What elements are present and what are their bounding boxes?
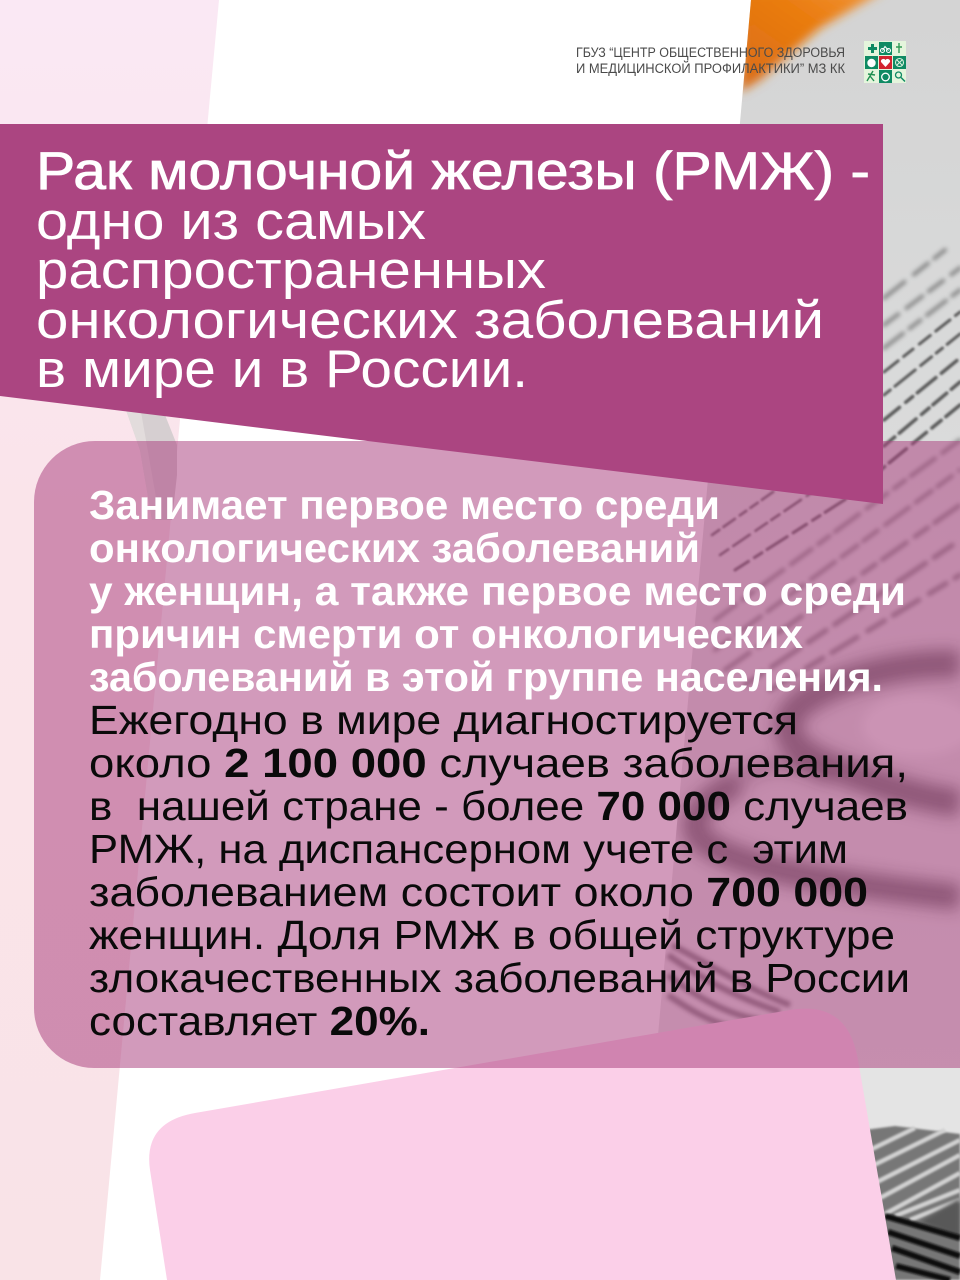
- body text: white bold statement: заболеваний в этой группе населения.: [89, 654, 883, 700]
- body text: white bold statement: [89, 482, 906, 700]
- title text: Рак молочной железы (РМЖ) -: [36, 142, 870, 201]
- organisation name header: ГБУЗ “ЦЕНТР ОБЩЕСТВЕННОГО ЗДОРОВЬЯ: [576, 45, 845, 60]
- title text: онкологических заболеваний: [36, 291, 824, 350]
- title text: распространенных: [36, 241, 546, 300]
- title text: [36, 142, 870, 399]
- body text: black statistics paragraph: составляет 20%.: [89, 998, 430, 1044]
- body text: white bold statement: Занимает первое место среди: [89, 482, 720, 528]
- body text: black statistics paragraph: женщин. Доля РМЖ в общей структуре: [89, 912, 895, 958]
- book page stripes bottom right: [865, 1126, 960, 1280]
- body text: black statistics paragraph: [89, 697, 910, 1044]
- body text: black statistics paragraph: около 2 100 000 случаев заболевания,: [89, 740, 908, 786]
- body text: white bold statement: у женщин, а также первое место среди: [89, 568, 906, 614]
- pink rounded shape at bottom: [149, 1009, 896, 1280]
- organisation name header: И МЕДИЦИНСКОЙ ПРОФИЛАКТИКИ” МЗ КК: [576, 61, 845, 76]
- body text: black statistics paragraph: заболеванием состоит около 700 000: [89, 869, 868, 915]
- body text: white bold statement: онкологических заболеваний: [89, 525, 700, 571]
- translucent text panel: [34, 441, 960, 1068]
- body text: black statistics paragraph: Ежегодно в мире диагностируется: [89, 697, 798, 743]
- body text: black statistics paragraph: РМЖ, на диспансерном учете с этим: [89, 826, 848, 872]
- body text: white bold statement: причин смерти от онкологических: [89, 611, 803, 657]
- pen in the left paper area: [126, 410, 177, 520]
- background: grey book photo on the right: [630, 0, 960, 1280]
- title text: одно из самых: [36, 192, 426, 251]
- title text: в мире и в России.: [36, 340, 528, 399]
- title banner: [0, 124, 883, 504]
- background: pink paper strip on the left: [0, 0, 219, 1280]
- body text: black statistics paragraph: злокачественных заболеваний в России: [89, 955, 910, 1001]
- organisation name header: [576, 45, 845, 76]
- body text: black statistics paragraph: в нашей стране - более 70 000 случаев: [89, 783, 908, 829]
- icon: organisation logo grid: [864, 41, 906, 83]
